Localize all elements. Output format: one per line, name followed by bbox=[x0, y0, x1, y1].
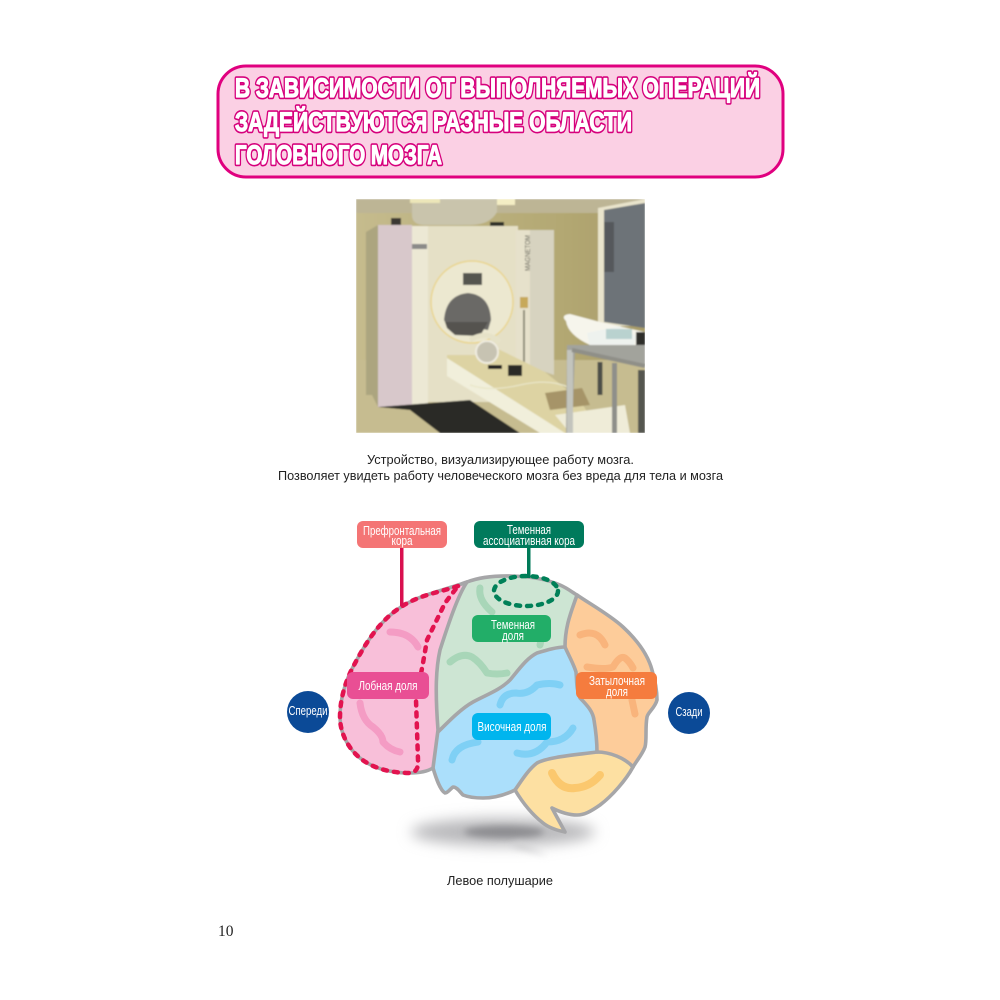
label: prefrontal cortex: Префронтальная bbox=[363, 524, 441, 538]
label: prefrontal cortex bbox=[357, 521, 447, 548]
title text: ГОЛОВНОГО МОЗГА bbox=[235, 140, 442, 170]
label: parietal lobe bbox=[472, 615, 551, 643]
label: parietal association cortex bbox=[474, 521, 584, 548]
label: parietal association cortex: ассоциативная кора bbox=[483, 534, 575, 548]
label: temporal lobe bbox=[472, 713, 551, 740]
title text: В ЗАВИСИМОСТИ ОТ ВЫПОЛНЯЕМЫХ ОПЕРАЦИЙ bbox=[235, 72, 760, 103]
frontal lobe bbox=[340, 582, 467, 773]
photo caption: Позволяет увидеть работу человеческого мозга без вреда для тела и мозга bbox=[278, 469, 723, 483]
connector: parietal association cortex bbox=[527, 548, 530, 578]
photo: brain scanner bbox=[356, 199, 645, 433]
connector: prefrontal cortex bbox=[400, 548, 404, 606]
marker: back bbox=[668, 692, 710, 734]
title text bbox=[235, 72, 760, 170]
title banner bbox=[218, 66, 783, 177]
label: parietal lobe: Теменная bbox=[491, 618, 535, 632]
brain shadow bbox=[411, 818, 595, 856]
marker: front bbox=[287, 691, 329, 733]
page number: 10 bbox=[218, 923, 234, 940]
label: parietal lobe: доля bbox=[502, 629, 524, 643]
label: frontal lobe: Лобная доля bbox=[358, 679, 418, 693]
temporal lobe bbox=[433, 647, 597, 798]
diagram caption: Левое полушарие bbox=[447, 874, 553, 888]
cerebellum bbox=[515, 752, 633, 832]
parietal association cortex dashed outline bbox=[494, 576, 558, 606]
marker: back: Сзади bbox=[676, 705, 703, 719]
photo caption: Устройство, визуализирующее работу мозга. bbox=[367, 453, 634, 467]
title text: ГОЛОВНОГО МОЗГА bbox=[235, 140, 442, 170]
title text: ЗАДЕЙСТВУЮТСЯ РАЗНЫЕ ОБЛАСТИ bbox=[235, 106, 632, 137]
label: occipital lobe: Затылочная bbox=[589, 674, 645, 688]
brain diagram bbox=[340, 576, 657, 832]
title text: В ЗАВИСИМОСТИ ОТ ВЫПОЛНЯЕМЫХ ОПЕРАЦИЙ bbox=[235, 72, 760, 103]
label: occipital lobe bbox=[576, 672, 657, 699]
title text: ЗАДЕЙСТВУЮТСЯ РАЗНЫЕ ОБЛАСТИ bbox=[235, 106, 632, 137]
label: occipital lobe: доля bbox=[606, 685, 628, 699]
occipital lobe bbox=[565, 595, 657, 767]
prefrontal cortex dashed outline bbox=[340, 586, 458, 773]
label: parietal association cortex: Теменная bbox=[507, 523, 551, 537]
brain folds bbox=[360, 588, 635, 788]
photo: brain scanner: MAGNETOM bbox=[525, 235, 532, 271]
marker: front: Спереди bbox=[288, 704, 328, 718]
label: temporal lobe: Височная доля bbox=[478, 720, 546, 734]
parietal lobe bbox=[436, 576, 577, 732]
label: prefrontal cortex: кора bbox=[392, 534, 413, 548]
photo caption bbox=[278, 453, 723, 483]
brain outlines bbox=[340, 576, 657, 832]
label: frontal lobe bbox=[347, 672, 429, 699]
